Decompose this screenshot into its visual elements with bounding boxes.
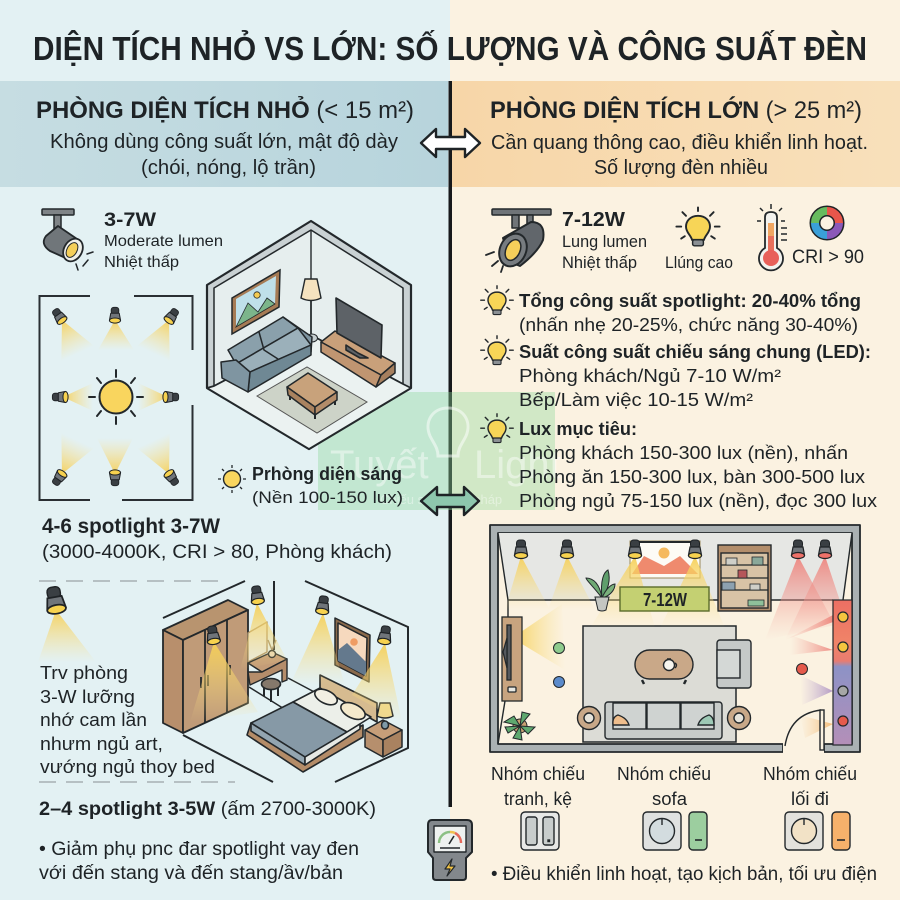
text: bedroom spotlights count: 2–4 spotlight 3-5W (ấm 2700-3000K)	[39, 798, 376, 820]
header panel: small room	[0, 81, 448, 187]
label: picture and shelf group: tranh, kệ	[504, 789, 572, 809]
text: target lux: Lux mục tiêu:	[519, 419, 637, 439]
text: target lux: Phòng khách 150-300 lux (nền), nhấn	[519, 443, 848, 463]
wall spotlights	[514, 540, 832, 558]
text: bedroom description: vướng ngủ thoy bed	[40, 756, 215, 777]
panel background: large room	[450, 0, 900, 900]
text: large room spec: 7-12W	[562, 209, 625, 231]
plant	[586, 570, 615, 611]
watermark: Tuyết	[330, 443, 429, 487]
corner plant	[504, 712, 535, 740]
panel background: small room	[0, 0, 450, 900]
watermark: Light	[474, 443, 561, 487]
dressing table with mirror	[248, 622, 287, 685]
text: general lighting power density: Phòng khách/Ngủ 7-10 W/m²	[519, 366, 781, 386]
icon: sun	[89, 370, 143, 424]
text: small room spec: 3-7W	[104, 210, 156, 231]
sofa	[605, 702, 722, 739]
icon: bulb	[676, 207, 720, 246]
side tables	[578, 706, 750, 730]
text: total spotlight power: Tổng công suất spotlight: 20-40% tổng	[519, 291, 861, 311]
wall art	[630, 541, 700, 578]
beams	[46, 312, 185, 482]
wattage label	[620, 587, 709, 611]
spotlight beams	[190, 603, 402, 722]
text: large room spec: Nhiệt thấp	[562, 254, 637, 272]
illustration: isometric bedroom	[163, 581, 408, 782]
icon: double switch	[521, 812, 559, 850]
tv console	[502, 617, 522, 701]
text: small room note: với đến stang và đến stang/ầv/bản	[39, 863, 343, 884]
label: sofa group: Nhóm chiếu	[617, 764, 711, 784]
coffee table	[635, 650, 693, 684]
arrow: middle double arrow	[421, 487, 479, 515]
text: small room spotlights count: 4-6 spotlight 3-7W	[42, 515, 220, 538]
text: small room note: • Giảm phụ pnc đar spotlight vay đen	[39, 839, 359, 860]
door	[783, 710, 824, 754]
header panel: small room: PHÒNG DIỆN TÍCH NHỎ (< 15 m²)	[36, 95, 414, 124]
icon: large track spotlight	[486, 209, 551, 272]
header panel: large room: Số lượng đèn nhiều	[594, 157, 768, 179]
text: large room spec: Lung lumen	[562, 233, 647, 251]
header panel: small room: Không dùng công suất lớn, mật độ dày	[50, 131, 398, 153]
icon: list bulb 1	[481, 286, 513, 315]
watermark	[318, 392, 561, 510]
callout: background lux: Prhòng diện sáng	[252, 464, 402, 484]
bed	[247, 675, 377, 772]
icon: thermometer	[757, 204, 787, 270]
text: large room spec	[562, 209, 647, 272]
label: picture and shelf group: Nhóm chiếu	[491, 764, 585, 784]
text: bedroom description: nhưm ngủ art,	[40, 733, 163, 754]
coffee table	[287, 373, 337, 419]
text: bulb label: Llúng cao	[665, 254, 733, 272]
center divider	[448, 81, 452, 807]
icon: walkway dimmer and switch	[785, 812, 850, 850]
text: control note: • Điều khiển linh hoạt, tạo kịch bản, tối ưu điện	[491, 864, 877, 885]
icon: list bulb 3	[481, 414, 513, 443]
callout: background lux: (Nền 100-150 lux)	[252, 488, 403, 507]
spotlights	[50, 307, 181, 487]
text: target lux: Phòng ăn 150-300 lux, bàn 300-500 lux	[519, 467, 865, 487]
tv stand	[321, 331, 395, 387]
armchair	[717, 640, 751, 688]
wattage label: 7-12W	[643, 590, 687, 610]
icon: bedroom side spotlight with beam	[38, 586, 96, 662]
header panel: large room: PHÒNG DIỆN TÍCH LỚN (> 25 m²)	[490, 96, 862, 124]
floor lamp	[301, 279, 321, 342]
text: small room spec	[104, 210, 223, 271]
television	[336, 298, 382, 358]
text: small room note	[39, 839, 359, 884]
label: sofa group	[617, 764, 711, 809]
floor plan: large living room	[490, 525, 860, 754]
icon: color wheel	[815, 211, 839, 235]
stool	[262, 678, 280, 702]
wardrobe	[163, 600, 248, 733]
text: bedroom description	[40, 662, 215, 777]
text: bedroom description: Trv phòng	[40, 662, 128, 683]
text: small room spec: Moderate lumen	[104, 233, 223, 250]
wall art	[335, 618, 370, 682]
callout: background lux	[218, 464, 403, 507]
text: target lux	[519, 419, 877, 511]
illustration: isometric living room	[207, 221, 411, 449]
wall spotlight beams	[505, 556, 843, 738]
text: CRI: CRI > 90	[792, 247, 864, 268]
text: general lighting power density: Suất công suất chiếu sáng chung (LED):	[519, 342, 871, 362]
text: bedroom description: 3-W lưỡng	[40, 686, 135, 707]
icon: small track spotlight	[42, 209, 93, 270]
text: bedroom description: nhớ cam lần	[40, 709, 147, 730]
rug	[257, 367, 367, 433]
text: total spotlight power	[519, 291, 861, 335]
label: walkway group: lối đi	[791, 789, 829, 809]
text: small room spotlights count	[42, 515, 392, 563]
text: small room spec: Nhiệt thấp	[104, 254, 179, 271]
watermark: Chiếu sáng giải pháp	[380, 492, 502, 507]
icon: list bulb 2	[481, 336, 513, 365]
text: general lighting power density: Bếp/Làm việc 10-15 W/m²	[519, 390, 753, 410]
bookshelf	[718, 545, 771, 611]
diagram: small room spotlight plan	[40, 296, 192, 500]
rug	[583, 626, 736, 742]
label: picture and shelf group	[491, 764, 585, 809]
indicator dots	[554, 642, 808, 688]
bedroom spotlights	[205, 585, 393, 645]
header panel: large room	[452, 81, 900, 187]
header panel: small room: (chói, nóng, lộ trần)	[141, 157, 316, 179]
sofa	[221, 317, 312, 392]
text: target lux: Phòng ngủ 75-150 lux (nền), đọc 300 lux	[519, 491, 877, 511]
icon: power meter	[428, 820, 472, 880]
icon: sofa dimmer and switch	[643, 812, 707, 850]
arrow: top double arrow	[421, 129, 480, 157]
text: general lighting power density	[519, 342, 871, 410]
text: small room spotlights count: (3000-4000K, CRI > 80, Phòng khách)	[42, 542, 392, 563]
wall picture	[232, 270, 280, 334]
label: walkway group: Nhóm chiếu	[763, 764, 857, 784]
label: walkway group	[763, 764, 857, 809]
light strip	[833, 600, 852, 745]
nightstand and lamp	[365, 703, 402, 757]
header panel: large room: Cần quang thông cao, điều khiển linh hoạt.	[491, 132, 868, 154]
label: sofa group: sofa	[652, 789, 688, 809]
text: total spotlight power: (nhấn nhẹ 20-25%, chức năng 30-40%)	[519, 315, 858, 335]
